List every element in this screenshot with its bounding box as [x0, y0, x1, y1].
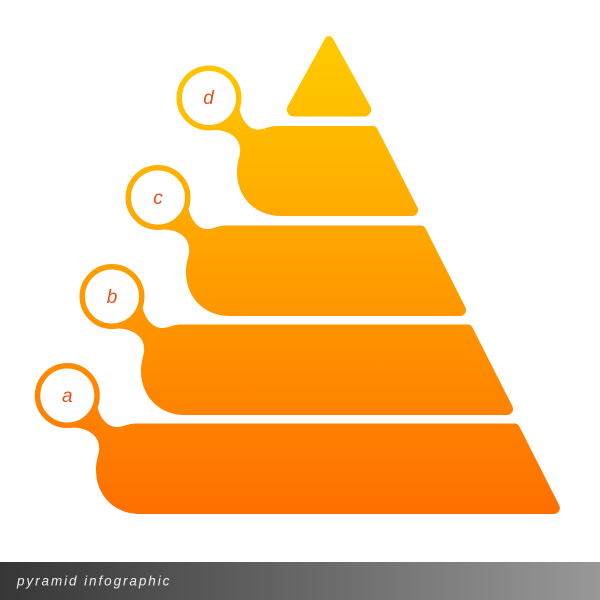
label c: c	[153, 188, 163, 209]
layer c	[128, 168, 466, 316]
layer b	[82, 267, 513, 415]
label a: a	[62, 386, 73, 407]
label d: d	[203, 88, 215, 109]
label b: b	[107, 287, 117, 308]
layer a	[38, 366, 560, 514]
footer title: pyramid infographic	[16, 574, 171, 588]
footer bar	[0, 562, 600, 600]
pyramid apex	[287, 36, 371, 116]
layer d	[179, 68, 418, 216]
